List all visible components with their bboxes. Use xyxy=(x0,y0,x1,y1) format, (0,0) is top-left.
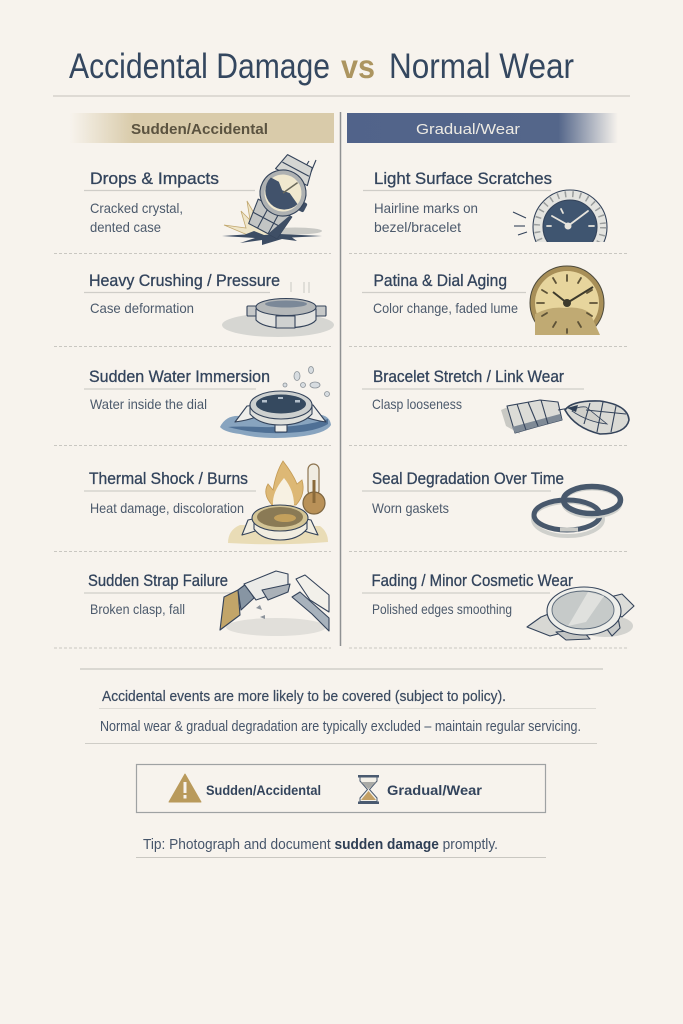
icon: crushed watch xyxy=(222,282,334,337)
column header: Gradual/Wear: Gradual/Wear xyxy=(416,121,520,138)
column header: Gradual/Wear xyxy=(347,113,618,143)
panel: heavy crushing xyxy=(84,271,334,337)
text: hairline marks xyxy=(374,200,478,235)
text: hairline marks: bezel/bracelet xyxy=(374,219,461,235)
panel: fading and cosmetic wear xyxy=(362,571,634,640)
panel: drops and impacts xyxy=(84,150,324,245)
text: case deformation: Case deformation xyxy=(90,300,194,316)
heading: patina: Patina & Dial Aging xyxy=(374,271,507,290)
heading: bracelet stretch: Bracelet Stretch / Link Wear xyxy=(373,367,564,386)
legend xyxy=(136,764,546,812)
text: cracked crystal: Cracked crystal, xyxy=(90,200,183,216)
panel: patina and dial aging xyxy=(362,266,604,340)
text: worn gaskets: Worn gaskets xyxy=(372,500,449,516)
icon: watch in water xyxy=(220,366,331,438)
icon: broken bracelet xyxy=(220,571,329,636)
text: color change: Color change, faded lume xyxy=(373,300,518,316)
icon: aged dial xyxy=(530,266,604,340)
heading: sudden strap failure: Sudden Strap Failure xyxy=(88,571,228,590)
title: vs xyxy=(341,48,375,85)
text: cracked crystal xyxy=(90,200,183,235)
text: water inside the dial: Water inside the dial xyxy=(90,396,207,412)
text: hairline marks: Hairline marks on xyxy=(374,200,478,216)
icon: worn gaskets xyxy=(533,486,621,536)
heading: heavy crushing: Heavy Crushing / Pressure xyxy=(89,271,280,290)
icon: warning triangle xyxy=(169,774,201,802)
heading: sudden water immersion: Sudden Water Immersion xyxy=(89,367,270,386)
text: cracked crystal: dented case xyxy=(90,219,161,235)
panel: bracelet stretch xyxy=(362,367,629,434)
heading: seal degradation: Seal Degradation Over Time xyxy=(372,469,564,488)
text: normal wear note: Normal wear & gradual degradation are typically excluded – maintain regular servicing. xyxy=(100,719,581,735)
text: accidental events note: Accidental events are more likely to be covered (subject to policy). xyxy=(102,688,506,705)
legend label: sudden: Sudden/Accidental xyxy=(206,782,321,798)
title xyxy=(69,47,574,86)
text: polished edges: Polished edges smoothing xyxy=(372,601,512,617)
panel: seal degradation xyxy=(362,469,621,536)
heading: fading: Fading / Minor Cosmetic Wear xyxy=(372,571,573,590)
panel: light surface scratches xyxy=(363,172,608,242)
legend label: gradual: Gradual/Wear xyxy=(387,782,483,798)
icon: polished watch xyxy=(527,587,634,640)
text: broken clasp: Broken clasp, fall xyxy=(90,601,185,617)
icon: stretched bracelet xyxy=(501,400,629,434)
panel: thermal shock xyxy=(84,461,328,544)
column header: Sudden/Accidental: Sudden/Accidental xyxy=(131,121,268,138)
panel: sudden strap failure xyxy=(84,571,329,636)
title: Accidental Damage xyxy=(69,47,330,86)
panel: sudden water immersion xyxy=(84,366,331,438)
tip: Tip: Photograph and document sudden damage promptly. xyxy=(143,836,498,853)
title: Normal Wear xyxy=(389,47,574,86)
text: clasp looseness: Clasp looseness xyxy=(372,396,462,412)
icon: falling watch hitting ground xyxy=(222,150,324,245)
icon: scratched dial xyxy=(512,190,608,242)
heading: thermal shock: Thermal Shock / Burns xyxy=(89,469,248,488)
heading: drops and impacts: Drops & Impacts xyxy=(90,169,219,188)
text: heat damage: Heat damage, discoloration xyxy=(90,500,244,516)
icon: burned watch with flame and thermometer xyxy=(228,461,328,544)
heading: light surface scratches: Light Surface Scratches xyxy=(374,169,552,188)
column header: Sudden/Accidental xyxy=(70,113,334,143)
icon: hourglass xyxy=(358,775,379,804)
